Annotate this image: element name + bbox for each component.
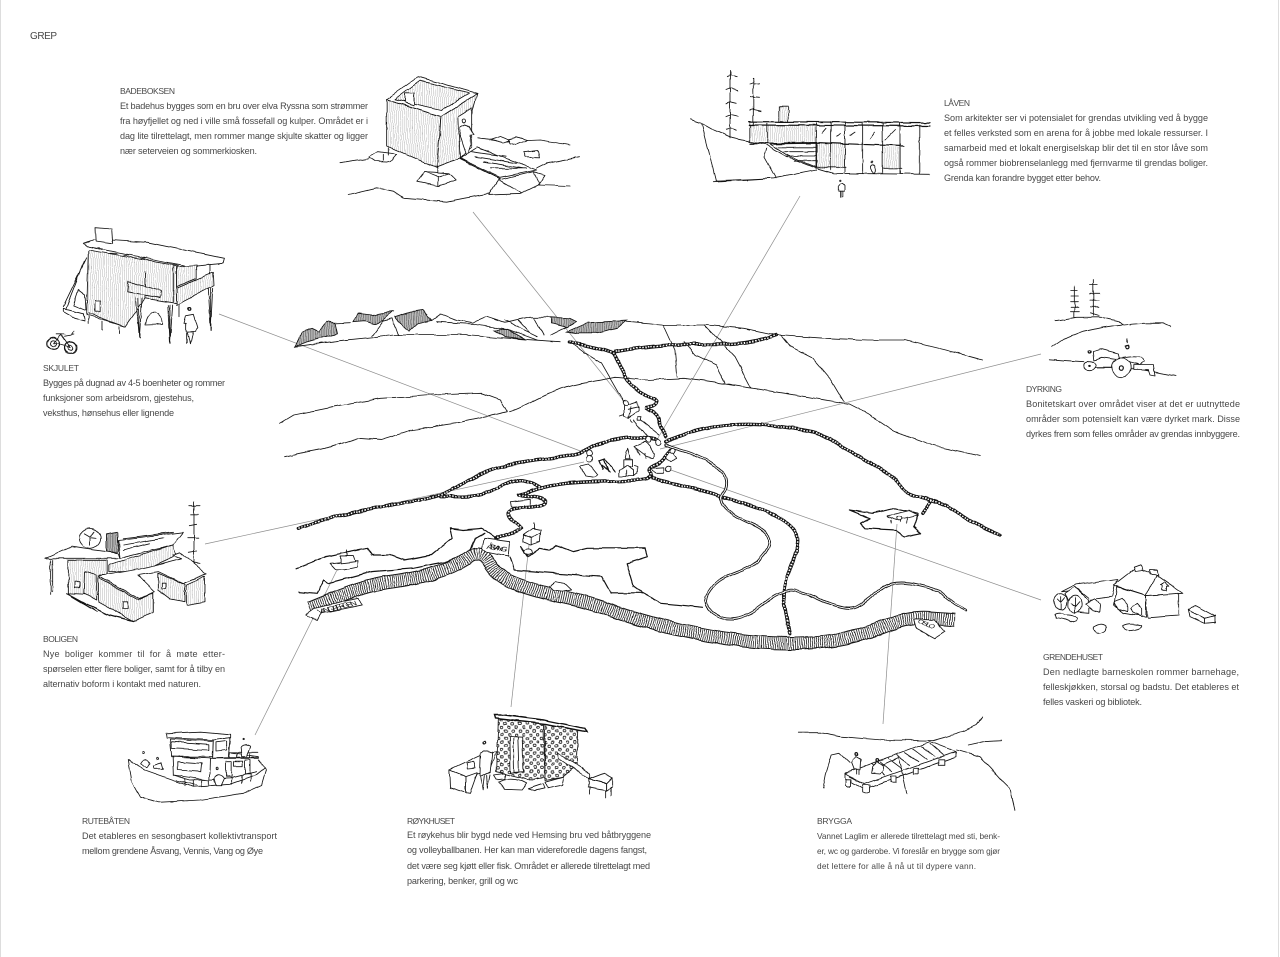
- text: Boligen: spørselen etter flere boliger, samt for å tilby en: [43, 664, 225, 674]
- main house: [1113, 564, 1183, 617]
- text: Boligen: [43, 634, 225, 689]
- text: Badeboksen: fra høyfjellet og ned i ville små fossefall og kulper. Området er i: [120, 116, 368, 126]
- bushes: [1055, 613, 1142, 633]
- ground lines: [340, 138, 580, 202]
- text: Skjulet: [43, 363, 225, 418]
- text: Skjulet: funksjoner som arbeidsrom, gjestehus,: [43, 393, 194, 403]
- text: Brygga: er, wc og garderobe. Vi foreslår en brygge som gjør: [817, 846, 1000, 856]
- map: landscape with roads, lakes and village: [280, 310, 1000, 643]
- text: Rutebåten: mellom grendene Åsvang, Vennis, Vang og Øye: [82, 846, 263, 856]
- stone walls: [497, 719, 578, 780]
- bath box: [387, 77, 477, 167]
- roof: [494, 715, 587, 732]
- text: Dyrking: områder som potensielt kan være dyrket mark. Disse: [1026, 414, 1240, 424]
- text: Låven: [944, 98, 1208, 183]
- rear wing: [45, 532, 183, 595]
- cabin: [166, 732, 231, 780]
- rocks: [368, 136, 545, 195]
- double-line local road: [666, 445, 967, 619]
- text: Røykhuset: det være seg kjøtt eller fisk. Området er allerede tilrettelagt med: [407, 861, 650, 871]
- title: GREP: [30, 31, 57, 42]
- text: Låven: Som arkitekter ser vi potensialet for grendas utvikling ved å bygge: [944, 113, 1208, 123]
- text: Skjulet: SKJULET: [43, 363, 79, 373]
- small Bolig building at switchback: [511, 499, 530, 507]
- lake Laglim: [849, 508, 921, 537]
- illustration: Badeboksen: [340, 77, 580, 202]
- people on boat: [141, 738, 251, 786]
- furrow: [1049, 359, 1176, 376]
- shed body: [87, 250, 177, 327]
- hand-drawn drawings: map and illustrations: [45, 70, 1215, 810]
- text: Rutebåten: RUTEBÅTEN: [82, 816, 130, 826]
- text: Låven: samarbeid med et lokalt energiselskap blir det til en stor låve som: [944, 143, 1208, 153]
- text: Røykhuset: RØYKHUSET: [407, 816, 455, 826]
- car on the road: [549, 582, 572, 592]
- trees: [1054, 594, 1082, 613]
- text: Låven: også rommer biobrenselanlegg med fjernvarme til grendas boliger.: [944, 158, 1208, 168]
- text: Grendehuset: felleskjøkken, storsal og badstu. Det etableres et: [1043, 682, 1239, 692]
- text: Badeboksen: dag lite tilrettelagt, men rommer mange skjulte skatter og ligger: [120, 131, 368, 141]
- illustration: Skjulet: [47, 228, 224, 353]
- jetty at the lake: [887, 511, 918, 523]
- text: Boligen: alternativ boform i kontakt med naturen.: [43, 679, 201, 689]
- hull: [128, 759, 266, 802]
- ferry on the lake: [330, 550, 358, 569]
- illustration: Boligen: [45, 502, 207, 621]
- text: Brygga: BRYGGA: [817, 816, 852, 826]
- balcony: [127, 265, 214, 305]
- text: Låven: Grenda kan forandre bygget etter behov.: [944, 173, 1101, 183]
- barn marker: [634, 437, 655, 458]
- text: Dyrking: Bonitetskart over området viser at det er uutnyttede: [1026, 399, 1240, 409]
- illustration: Rutebåten: [128, 732, 266, 802]
- text: Røykhuset: parkering, benker, grill og wc: [407, 876, 518, 886]
- table: [449, 752, 497, 793]
- illustration: Dyrking: [1049, 280, 1176, 377]
- posts: [89, 264, 213, 343]
- village cluster with church and buildings: [580, 401, 677, 477]
- ramp: [460, 147, 537, 179]
- text: Boligen: BOLIGEN: [43, 634, 78, 644]
- field: [580, 464, 597, 477]
- text: Brygga: Vannet Laglim er allerede tilrettelagt med sti, benk-: [817, 831, 1000, 841]
- lake shorelines: [296, 528, 702, 607]
- signpost Åsvang: [482, 538, 510, 556]
- shed: [1188, 605, 1215, 623]
- text: Dyrking: DYRKING: [1026, 384, 1062, 394]
- church: [619, 448, 637, 476]
- school wing: [1062, 579, 1118, 613]
- illustration: Låven: [690, 70, 930, 197]
- chimney: [779, 107, 789, 122]
- text: Badeboksen: BADEBOKSEN: [120, 86, 175, 96]
- mountain range on the horizon: [295, 310, 983, 360]
- person in door: [460, 119, 474, 157]
- text: Grendehuset: [1043, 652, 1239, 707]
- hatched main road E16: [310, 554, 955, 643]
- text: Røykhuset: og volleyballbanen. Her kan man videreforedle dagens fangst,: [407, 845, 647, 855]
- person: [480, 741, 493, 789]
- round tree: [79, 528, 101, 548]
- wood cladding: [750, 125, 902, 168]
- illustration: Brygga: [798, 717, 1015, 810]
- circles on road: [587, 450, 593, 456]
- person: [184, 308, 197, 343]
- text: Badeboksen: [120, 86, 368, 156]
- text: Rutebåten: Det etableres en sesongbasert kollektivtransport: [82, 831, 277, 841]
- text: Grendehuset: felles vaskeri og bibliotek.: [1043, 697, 1142, 707]
- people: [838, 161, 875, 197]
- chimney pipe and smoker: [558, 753, 613, 797]
- text: Dyrking: dyrkes frem som felles områder av grendas innbyggere.: [1026, 429, 1240, 439]
- roof: [83, 228, 224, 267]
- bicycle: [47, 332, 76, 353]
- text: Røykhuset: [407, 816, 651, 886]
- hills: [1052, 317, 1171, 347]
- frame: [748, 122, 930, 174]
- front wing: [67, 552, 207, 621]
- chimney: [106, 532, 118, 552]
- text: Skjulet: Bygges på dugnad av 4-5 boenheter og rommer: [43, 378, 225, 388]
- small entries: [1085, 598, 1142, 617]
- shelter marker: [599, 459, 615, 473]
- hill: [690, 119, 930, 182]
- pier: [845, 742, 956, 794]
- signpost Vang / Bergen: VANG / BERGEN: [316, 599, 358, 616]
- text: Boligen: Nye boliger kommer til for å møte etter-: [43, 649, 225, 659]
- signpost Åsvang: ÅSVANG: [486, 543, 509, 554]
- illustration: Røykhuset: [449, 715, 613, 797]
- text: Skjulet: veksthus, hønsehus eller lignende: [43, 408, 174, 418]
- foundation stones: [494, 773, 563, 791]
- signpost Vang / Bergen: [305, 598, 362, 620]
- rope and bench: [63, 258, 87, 321]
- valley ridgelines: [280, 325, 980, 457]
- fishing lines: [823, 753, 907, 793]
- tree: [186, 502, 200, 565]
- illustration: Grendehuset: [1054, 564, 1215, 633]
- text: Badeboksen: nær seterveien og sommerkiosken.: [120, 146, 257, 156]
- text: Dyrking: [1026, 384, 1240, 439]
- fishers: [852, 753, 883, 774]
- signpost Oslo: [914, 618, 944, 638]
- signpost Oslo: OSLO: [916, 618, 937, 631]
- smokehouse on map: [523, 523, 541, 554]
- hanging lamp: [145, 312, 163, 325]
- bathhouse marker: [619, 401, 641, 422]
- trees: [726, 70, 761, 138]
- text: Låven: LÅVEN: [944, 98, 970, 108]
- tractor: [1083, 339, 1155, 377]
- shorelines: [798, 717, 983, 741]
- gravel roads: [298, 335, 1000, 633]
- text: Rutebåten: [82, 816, 277, 856]
- text: Badeboksen: Et badehus bygges som en bru over elva Ryssna som strømmer: [120, 101, 368, 111]
- text: Låven: et felles verksted som en arena for å jobbe med lokale ressurser. I: [944, 128, 1208, 138]
- wheelhouse deck: [210, 752, 258, 777]
- text: Grendehuset: Den nedlagte barneskolen rommer barnehage,: [1043, 667, 1239, 677]
- text: Brygga: det lettere for alle å nå ut til dypere vann.: [817, 861, 976, 871]
- grendehuset marker: [650, 440, 677, 473]
- text: Brygga: [817, 816, 1000, 871]
- leader lines: [205, 196, 1041, 735]
- trees: [1070, 280, 1099, 317]
- text: Røykhuset: Et røykehus blir bygd nede ved Hemsing bru ved båtbryggene: [407, 830, 651, 840]
- text: Grendehuset: GRENDEHUSET: [1043, 652, 1103, 662]
